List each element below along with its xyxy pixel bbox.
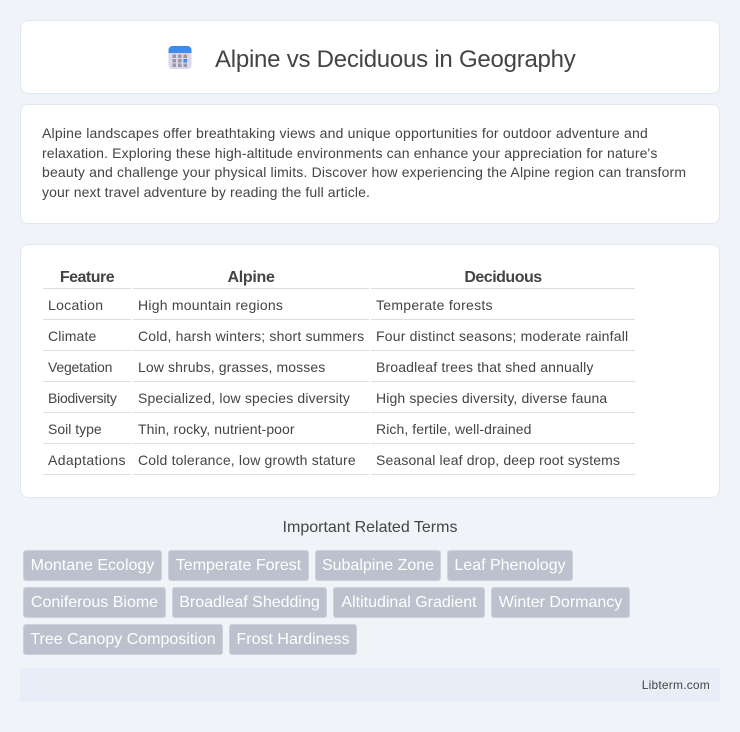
tag: Frost Hardiness: [237, 631, 349, 648]
heading: related terms: Important Related Terms: [283, 519, 457, 536]
tag cloud: [23, 550, 630, 655]
table header: Alpine: [227, 269, 275, 286]
tag: [23, 624, 223, 655]
row: location: Temperate forests: [376, 297, 493, 313]
intro text: [42, 125, 686, 200]
row: adaptations: Seasonal leaf drop, deep root systems: [376, 452, 620, 468]
row: location: [48, 297, 493, 313]
row: climate: Climate: [48, 328, 96, 344]
row: adaptations: Cold tolerance, low growth stature: [138, 452, 356, 468]
row: adaptations: [48, 452, 620, 468]
tag: Tree Canopy Composition: [30, 631, 216, 648]
row: soil type: Thin, rocky, nutrient-poor: [138, 421, 295, 437]
tag: [229, 624, 357, 655]
row: biodiversity: Biodiversity: [48, 390, 117, 406]
tag: Temperate Forest: [176, 557, 301, 574]
footer: [20, 668, 720, 702]
row: biodiversity: [48, 390, 608, 406]
footer credit: Libterm.com: [642, 678, 710, 692]
tag: [172, 587, 327, 618]
icon: calendar: [168, 46, 192, 69]
tag: [491, 587, 630, 618]
row: climate: [48, 328, 628, 344]
tag: Subalpine Zone: [322, 557, 434, 574]
tag: Broadleaf Shedding: [179, 594, 320, 611]
intro text: your next travel adventure by reading the full article.: [42, 184, 370, 200]
row: soil type: Soil type: [48, 421, 102, 437]
tag: Montane Ecology: [31, 557, 154, 574]
tag: [168, 550, 309, 581]
intro text: beauty and challenge your physical limits. Discover how experiencing the Alpine region can transform: [42, 164, 686, 180]
row: soil type: Rich, fertile, well-drained: [376, 421, 531, 437]
intro text: relaxation. Exploring these high-altitude environments can enhance your appreciation for nature's: [42, 145, 658, 161]
tag: Altitudinal Gradient: [341, 594, 477, 611]
panel: title header: [20, 20, 720, 94]
row: vegetation: Broadleaf trees that shed annually: [376, 359, 594, 375]
row: climate: Four distinct seasons; moderate rainfall: [376, 328, 628, 344]
tag: Coniferous Biome: [31, 594, 158, 611]
tag: [333, 587, 485, 618]
intro text: Alpine landscapes offer breathtaking views and unique opportunities for outdoor adventure and: [42, 125, 648, 141]
row: location: Location: [48, 297, 103, 313]
tag: [447, 550, 573, 581]
row: biodiversity: High species diversity, diverse fauna: [376, 390, 607, 406]
row: adaptations: Adaptations: [48, 452, 126, 468]
row: vegetation: [48, 359, 594, 375]
row: biodiversity: Specialized, low species diversity: [138, 390, 350, 406]
panel: comparison table: [20, 244, 720, 498]
row: vegetation: Vegetation: [48, 359, 112, 375]
title: Alpine vs Deciduous in Geography: [215, 46, 576, 73]
row: climate: Cold, harsh winters; short summers: [138, 328, 364, 344]
row: vegetation: Low shrubs, grasses, mosses: [138, 359, 325, 375]
tag: [23, 550, 162, 581]
tag: Winter Dormancy: [499, 594, 622, 611]
tag: [23, 587, 166, 618]
table header: [60, 269, 542, 286]
tag: [315, 550, 441, 581]
row: location: High mountain regions: [138, 297, 283, 313]
row: soil type: [48, 421, 531, 437]
table header: Deciduous: [464, 269, 542, 286]
table header: Feature: [60, 269, 114, 286]
tag: Leaf Phenology: [454, 557, 566, 574]
panel: introduction: [20, 104, 720, 224]
